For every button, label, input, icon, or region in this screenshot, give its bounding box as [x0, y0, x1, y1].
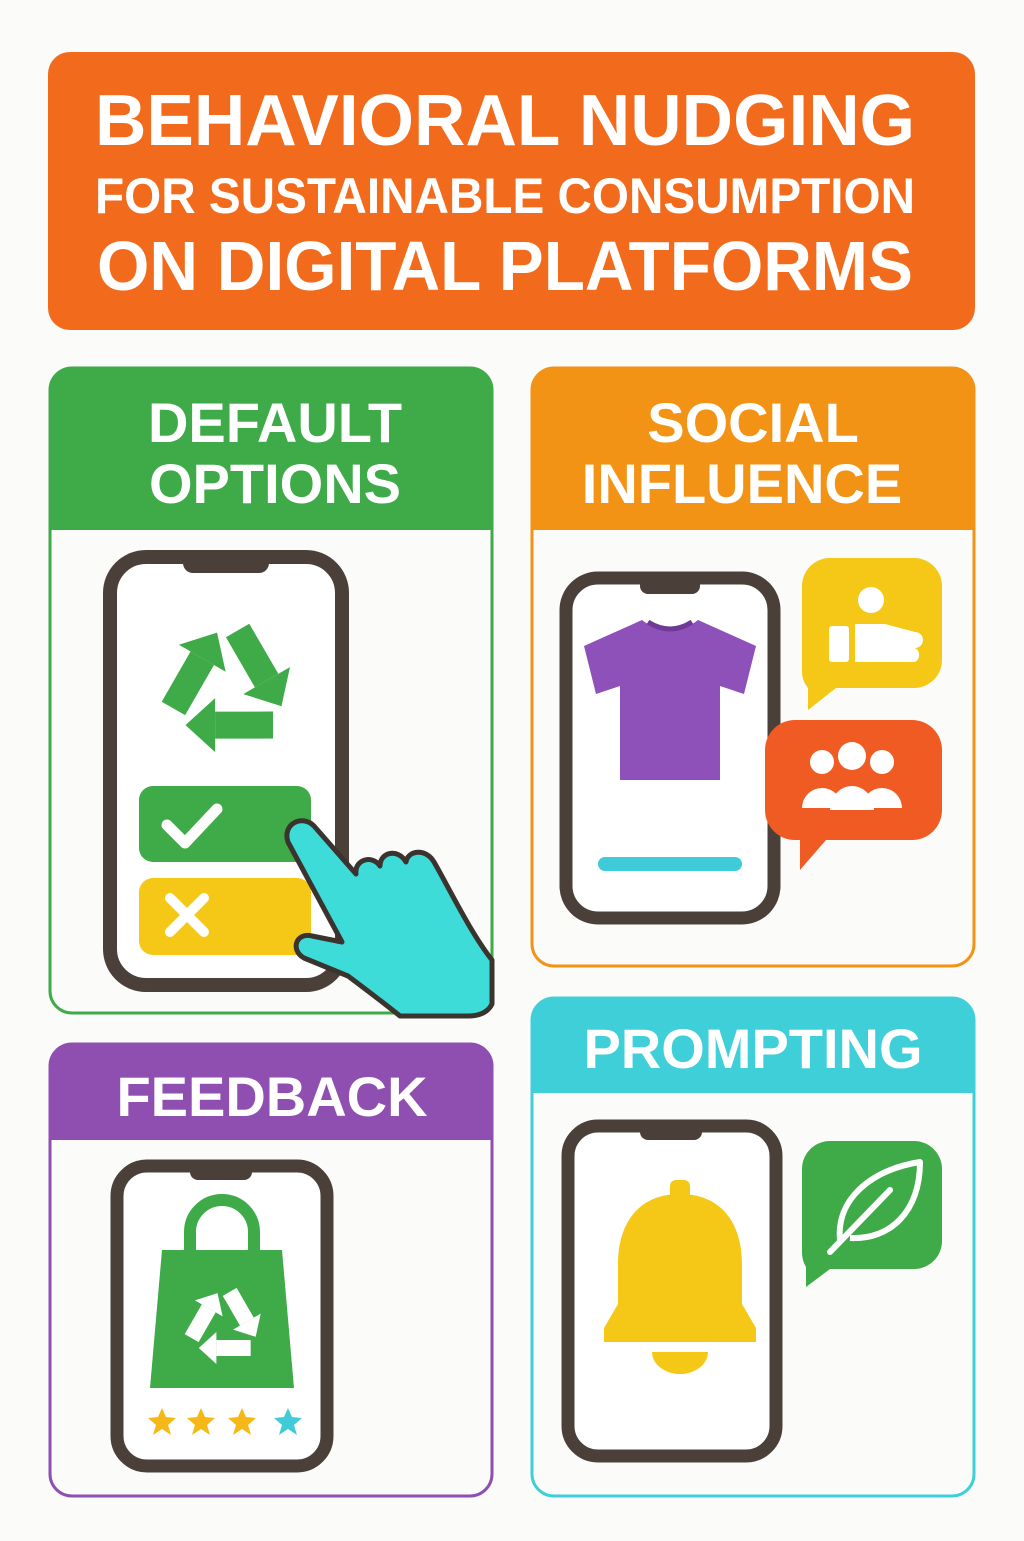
heading: feedback: FEEDBACK — [116, 1065, 428, 1128]
heading: default options: DEFAULT — [148, 391, 402, 454]
title line 1: BEHAVIORAL NUDGING — [95, 81, 915, 161]
panel: default options — [50, 368, 492, 1016]
icon: phone with shirt — [566, 578, 774, 918]
stars rating — [148, 1408, 302, 1435]
panel: default options: OPTIONS — [149, 452, 401, 515]
panel: social influence: INFLUENCE — [582, 452, 902, 515]
icon: community bubble — [765, 720, 942, 870]
icon: phone with bell — [568, 1126, 776, 1456]
button: decline — [139, 878, 311, 955]
icon: recycle — [147, 625, 290, 770]
panel: social influence — [532, 368, 974, 966]
panel: prompting — [532, 998, 974, 1496]
icon: phone with choices — [110, 557, 342, 985]
title banner — [48, 52, 975, 330]
title line 3: ON DIGITAL PLATFORMS — [97, 227, 913, 305]
heading: prompting: PROMPTING — [583, 1017, 923, 1080]
button: accept — [139, 786, 311, 862]
icon: leaf bubble — [802, 1141, 942, 1287]
heading: social influence: SOCIAL — [647, 391, 859, 454]
icon: like bubble — [802, 558, 942, 710]
title line 2: FOR SUSTAINABLE CONSUMPTION — [95, 168, 915, 224]
icon: phone with bag and stars — [117, 1166, 327, 1466]
icon: pointing hand — [287, 821, 492, 1016]
panel: feedback — [50, 1044, 492, 1496]
